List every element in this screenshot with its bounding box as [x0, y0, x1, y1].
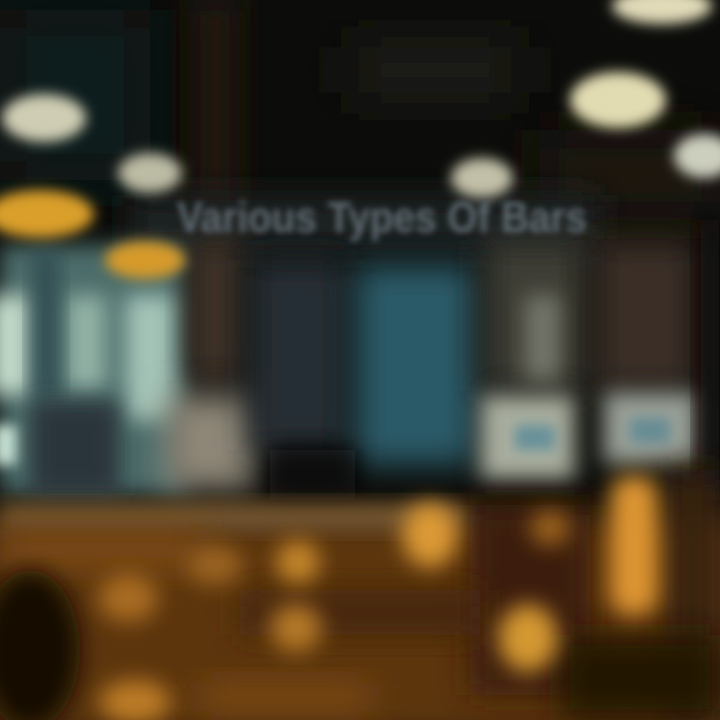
icon: amber pendant lamps — [0, 190, 185, 279]
title: Various Types Of Bars — [177, 193, 587, 242]
icon: ceiling lights — [2, 0, 720, 198]
panel: back wall with windows and shelves — [0, 220, 720, 500]
panel: amber foreground counter — [0, 470, 720, 720]
